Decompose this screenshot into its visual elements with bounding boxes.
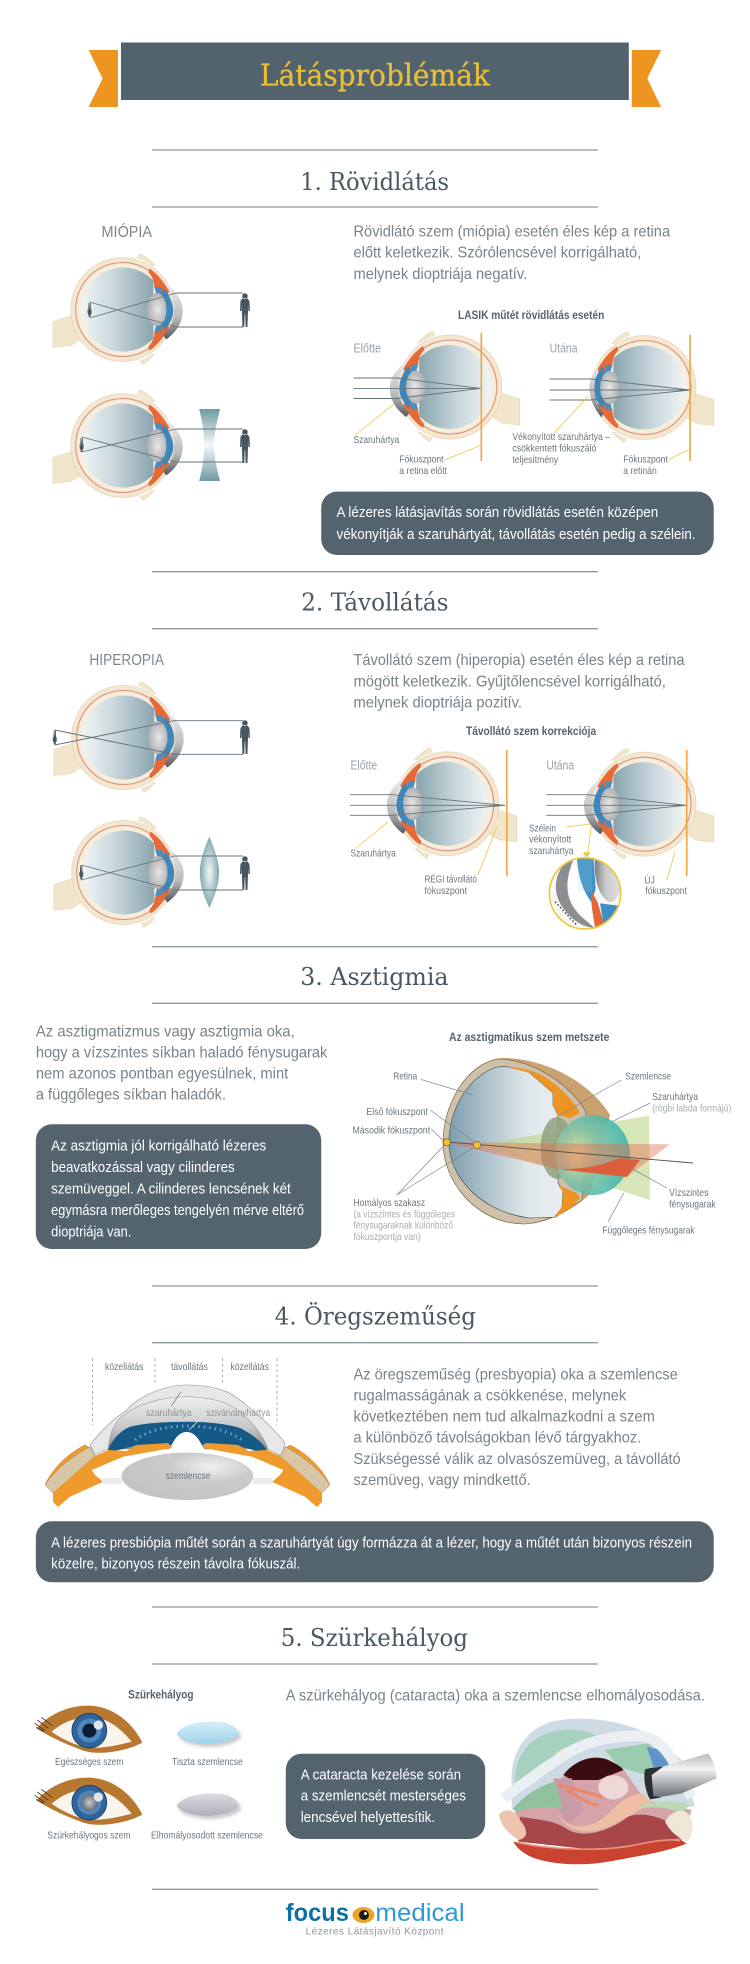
labels: ÚJ — [644, 873, 655, 886]
heading: 4. Öregszeműség — [275, 1302, 476, 1331]
text block: melynek dioptriája pozitív. — [353, 694, 522, 711]
labels: a retina előtt — [399, 466, 447, 477]
labels: Szaruhártya — [652, 1092, 698, 1103]
callout: szemüveggel. A cilinderes lencsének két — [51, 1181, 291, 1197]
part labels — [146, 1407, 270, 1482]
icon: healthy eye — [35, 1706, 142, 1753]
logo word focus: focus — [286, 1899, 349, 1927]
labels: Tiszta szemlencse — [172, 1757, 243, 1768]
part labels: szemlencse — [166, 1470, 211, 1482]
zone labels: közellátás — [231, 1361, 269, 1373]
eye diagram: myopia uncorrected — [53, 254, 250, 364]
logo eye icon — [352, 1907, 374, 1923]
orange and tan left — [45, 1443, 172, 1507]
surgery illustration — [499, 1719, 717, 1864]
cornea — [555, 1115, 630, 1195]
labels: fénysugaraknak különböző — [353, 1221, 453, 1232]
leader lines — [356, 822, 675, 880]
callout: lencsével helyettesítik. — [301, 1810, 435, 1826]
heading: 2. Távollátás — [301, 589, 449, 617]
callout — [36, 1521, 714, 1582]
labels: Retina — [393, 1071, 417, 1082]
white pupil gap — [167, 1432, 206, 1452]
section 3: Asztigmia — [36, 963, 731, 1249]
text block: Rövidlátó szem (miópia) esetén éles kép a retina — [353, 223, 670, 240]
labels: fókuszpont — [645, 886, 687, 897]
orange lower choroid — [553, 1185, 580, 1218]
title banner — [89, 42, 661, 107]
leader lines — [397, 1079, 667, 1222]
logo subtitle: Lézeres Látásjavító Központ — [306, 1926, 444, 1937]
labels: Szélein — [529, 823, 556, 834]
text block: A szürkehályog (cataracta) oka a szemlencse elhomályosodása. — [286, 1688, 705, 1705]
section 1: Rövidlátás — [53, 168, 714, 555]
labels: Szürkehályogos szem — [47, 1831, 131, 1842]
outer eye shell — [512, 1719, 695, 1810]
horizontal rays plane — [447, 1142, 670, 1177]
logo — [286, 1899, 465, 1937]
text block: hogy a vízszintes síkban haladó fénysugarak — [36, 1045, 327, 1062]
callout: Az asztigmia jól korrigálható lézeres — [51, 1138, 266, 1154]
icon: clear lens — [177, 1721, 241, 1747]
callout: A cataracta kezelése során — [301, 1767, 461, 1783]
right interior blue and green — [605, 1743, 675, 1777]
labels: teljesítmény — [512, 455, 559, 466]
hyperopia correction diagram — [350, 724, 714, 929]
text block: nem azonos pontban egyesülnek, mint — [36, 1066, 289, 1083]
white band — [503, 1736, 692, 1798]
orange upper choroid — [507, 1067, 580, 1118]
labels: szaruhártya — [529, 846, 574, 857]
labels — [350, 823, 687, 897]
text block: Az asztigmatizmus vagy asztigmia oka, — [36, 1024, 295, 1041]
icon: concave lens — [199, 409, 220, 481]
green rims — [513, 1782, 563, 1812]
comparison title: Szürkehályog — [128, 1687, 194, 1701]
eyeball cross-section — [443, 1058, 693, 1224]
text block: rugalmasságának a csökkenése, melynek — [353, 1387, 626, 1404]
callout: vékonyítják a szaruhártyát, távollátás esetén pedig a szélein. — [337, 527, 695, 543]
ribbon left — [89, 50, 118, 107]
icon: cataract eye — [35, 1778, 142, 1825]
labels: fénysugarak — [669, 1200, 716, 1211]
labels: Első fókuszpont — [366, 1107, 428, 1118]
text block: a különböző távolságokban lévő tárgyakhoz. — [353, 1430, 641, 1447]
dark cavity — [563, 1758, 623, 1780]
diagram title: Az asztigmatikus szem metszete — [449, 1030, 610, 1044]
lower dark red cavity — [518, 1815, 680, 1850]
eye before — [350, 748, 517, 876]
callout: egymásra merőleges tengelyén mérve eltérő — [51, 1203, 304, 1219]
iris — [108, 1422, 267, 1453]
vertical rays plane — [477, 1116, 650, 1200]
leader lines — [356, 396, 690, 460]
labels — [352, 1071, 731, 1243]
part labels: szaruhártya — [146, 1407, 192, 1419]
diagram title: Távollátó szem korrekciója — [466, 724, 596, 738]
labels: Függőleges fénysugarak — [602, 1225, 695, 1236]
labels: Vízszintes — [669, 1188, 708, 1199]
heading: 5. Szürkehályog — [281, 1624, 468, 1652]
white bumps — [499, 1810, 526, 1840]
text block — [353, 1366, 681, 1489]
text block: szemüveg, vagy mindkettő. — [353, 1472, 531, 1489]
zone labels: távollátás — [171, 1361, 208, 1373]
text block: előtt keletkezik. Szórólencsével korrigálható, — [353, 244, 641, 262]
axis line — [448, 1142, 693, 1163]
section 2: Távollátás — [53, 589, 714, 929]
icon: clouded lens — [177, 1793, 241, 1819]
text block: melynek dioptriája negatív. — [353, 266, 527, 283]
banner panel — [121, 42, 629, 100]
labels: Szemlencse — [625, 1071, 671, 1082]
membranes and fibers — [553, 1778, 583, 1825]
zone labels: közellátás — [105, 1361, 143, 1373]
cornea dome — [90, 1385, 285, 1457]
labels: Második fókuszpont — [352, 1125, 430, 1136]
labels — [47, 1757, 263, 1842]
lens — [122, 1453, 253, 1500]
labels: fókuszpont — [424, 886, 467, 897]
eye after — [546, 748, 714, 876]
labels: Elhomályosodott szemlencse — [151, 1831, 263, 1842]
astigmatic eye diagram — [352, 1030, 731, 1243]
text block — [353, 652, 685, 711]
text block: a függőleges síkban haladók. — [36, 1087, 226, 1104]
hyperopia label: HIPEROPIA — [89, 652, 164, 669]
callout: A lézeres látásjavítás során rövidlátás esetén középen — [337, 505, 658, 521]
text block: mögött keletkezik. Gyűjtőlencsével korrigálható, — [353, 673, 666, 690]
text block: Az öregszeműség (presbyopia) oka a szemlencse — [353, 1366, 678, 1383]
labels: Szaruhártya — [350, 849, 396, 860]
eye and lens comparison — [35, 1687, 263, 1842]
instrument tube — [645, 1753, 717, 1798]
text block: Szükségessé válik az olvasószemüveg, a távollátó — [353, 1451, 681, 1468]
labels: vékonyított — [529, 835, 571, 846]
labels: Szaruhártya — [353, 435, 399, 446]
logo word medical: medical — [375, 1899, 465, 1927]
zone labels — [105, 1361, 269, 1373]
text block: Távollátó szem (hiperopia) esetén éles kép a retina — [353, 652, 685, 669]
callout — [286, 1754, 485, 1839]
labels: Fókuszpont — [399, 454, 444, 466]
lens — [541, 1118, 573, 1178]
labels: Vékonyított szaruhártya – — [512, 432, 610, 443]
text block — [353, 223, 670, 283]
LASIK diagram — [353, 308, 714, 477]
labels: (a vízszintes és függőleges — [353, 1209, 455, 1220]
ribbon right — [632, 50, 661, 107]
miopia label: MIÓPIA — [102, 222, 152, 241]
labels: Egészséges szem — [55, 1757, 124, 1768]
artificial lens — [598, 1775, 628, 1799]
labels: Homályos szakasz — [353, 1198, 425, 1209]
heading: 1. Rövidlátás — [300, 168, 449, 196]
anterior eye cross-section diagram — [45, 1358, 330, 1507]
section 5: Szürkehályog — [35, 1624, 717, 1864]
labels — [353, 432, 668, 477]
labels: fókuszpontja van) — [353, 1232, 421, 1243]
eye before — [353, 331, 520, 461]
callout: dioptriája van. — [51, 1224, 131, 1240]
section 4: Öregszeműség — [36, 1302, 714, 1582]
pink lens tissue — [558, 1793, 652, 1832]
before label: Előtte — [350, 757, 377, 772]
callout: beavatkozással vagy cilinderes — [51, 1160, 235, 1176]
labels: a retinán — [623, 466, 657, 477]
text block — [36, 1024, 327, 1104]
back cavity pink — [515, 1767, 692, 1843]
iris teal — [515, 1730, 598, 1787]
title: Látásproblémák — [260, 58, 491, 94]
orange and tan right — [203, 1443, 330, 1507]
pale ligaments — [103, 1478, 272, 1484]
labels: csökkentett fókuszáló — [512, 444, 597, 455]
eye after — [550, 332, 714, 461]
vitreous — [449, 1067, 563, 1218]
bottom red lip — [513, 1839, 687, 1864]
after label: Utána — [546, 757, 575, 772]
eye diagram: hyperopia uncorrected — [53, 682, 250, 792]
callout: közelre, bizonyos részein távolra fókuszál. — [51, 1557, 300, 1573]
inset: thinned cornea detail — [549, 852, 622, 929]
labels: RÉGI távollátó — [424, 873, 477, 886]
labels: Fókuszpont — [623, 454, 668, 466]
eye diagram: myopia corrected with concave lens — [53, 390, 250, 500]
callout: A lézeres presbiópia műtét során a szaruhártyát úgy formázza át a lézer, hogy a műtét után bizonyos részein — [51, 1535, 692, 1551]
icon: convex lens — [200, 837, 219, 908]
heading: 3. Asztigmia — [300, 963, 449, 991]
callout — [36, 1124, 321, 1249]
focal points — [443, 1139, 450, 1146]
callout: a szemlencsét mesterséges — [301, 1789, 466, 1805]
eye diagram: hyperopia corrected with convex lens — [54, 816, 250, 928]
text block: következtében nem tud alkalmazkodni a szem — [353, 1409, 655, 1426]
diagram title: LASIK műtét rövidlátás esetén — [458, 308, 604, 322]
labels: (rögbi labda formájú) — [652, 1104, 731, 1115]
callout — [321, 492, 714, 555]
after label: Utána — [550, 341, 578, 356]
before label: Előtte — [353, 341, 381, 356]
part labels: szivárványhártya — [207, 1407, 270, 1419]
